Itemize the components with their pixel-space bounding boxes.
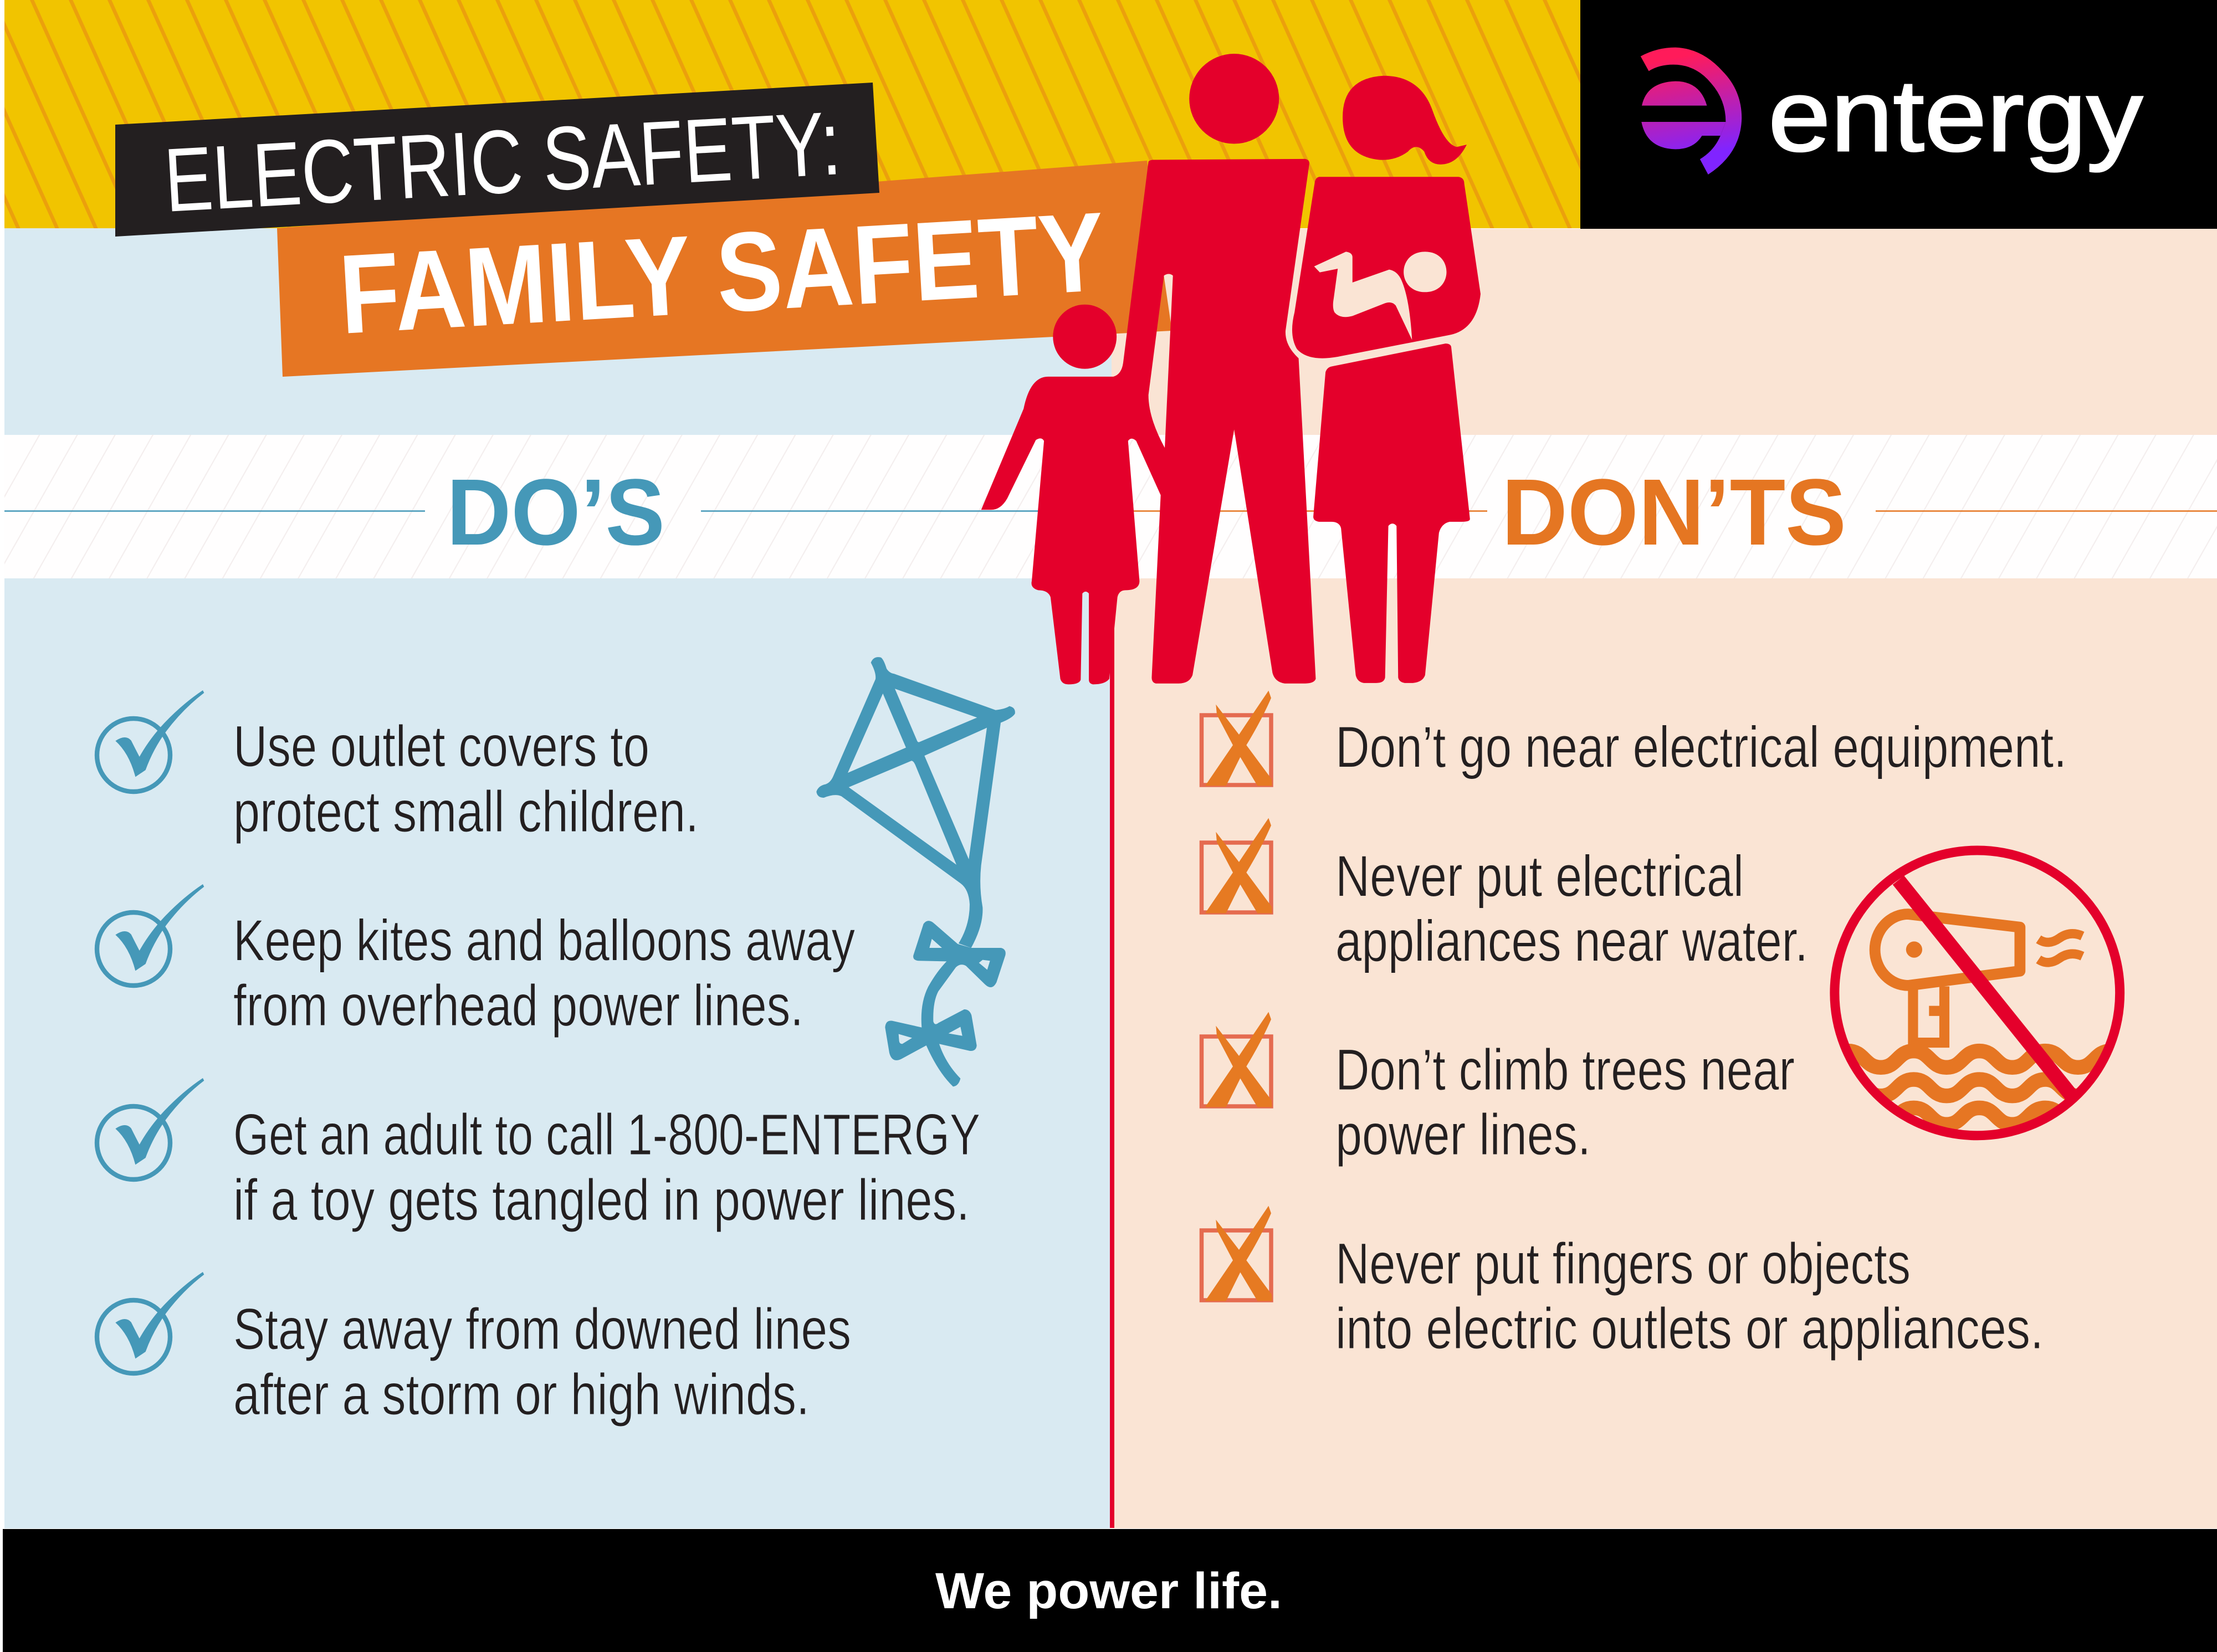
heading: donts: DON’TS <box>1502 460 1846 565</box>
item 3 text: if a toy gets tangled in power lines. <box>233 1168 970 1233</box>
heading: dos: DO’S <box>447 460 665 565</box>
icon: kite <box>816 657 1015 1086</box>
title banner: electric safety: ELECTRIC SAFETY: <box>162 92 843 231</box>
dryer body <box>1875 914 2020 986</box>
item 3 text: Don’t climb trees near <box>1335 1038 1795 1102</box>
item 4 text <box>233 1297 851 1427</box>
prohibition slash <box>1898 880 2072 1097</box>
panel: dos upper background <box>4 228 1112 435</box>
item 3 x box <box>1201 1012 1272 1107</box>
panel: donts lower background <box>1110 578 2217 1528</box>
item 3 text <box>1335 1038 1795 1167</box>
dryer dot <box>1906 941 1922 958</box>
panel: yellow striped header <box>4 0 1583 228</box>
item 4 text: into electric outlets or appliances. <box>1335 1296 2044 1361</box>
item 2 text: from overhead power lines. <box>233 973 803 1038</box>
item 2 text <box>233 909 855 1038</box>
dryer air <box>2039 933 2082 962</box>
red vertical divider <box>1110 609 1114 1528</box>
item 3 check <box>97 1078 204 1179</box>
item 4 text <box>1335 1232 2044 1361</box>
logo: entergy <box>1641 48 2143 175</box>
item 1 text <box>233 714 699 844</box>
water waves <box>1848 1051 2111 1125</box>
panel: donts upper background <box>1112 229 2217 435</box>
item 4 text: Stay away from downed lines <box>233 1297 851 1362</box>
title banner: family safety: FAMILY SAFETY <box>336 189 1108 358</box>
footer bar <box>3 1529 2217 1652</box>
icon: entergy mark <box>1641 48 1742 175</box>
band: heading strip <box>4 435 2217 578</box>
item 1 check <box>97 690 204 792</box>
list: donts <box>1201 691 2067 1361</box>
icon: no hair dryer near water <box>1835 850 2120 1136</box>
item 2 text: Never put electrical <box>1335 844 1744 909</box>
illustration: family silhouette <box>981 54 1481 684</box>
footer tagline: We power life. <box>935 1563 1282 1619</box>
child head <box>1053 305 1117 369</box>
item 4 x box <box>1201 1206 1272 1301</box>
item 2 text: appliances near water. <box>1335 909 1808 974</box>
item 1 text: Use outlet covers to <box>233 714 649 779</box>
item 2 x box <box>1201 818 1272 913</box>
item 3 text: Get an adult to call 1-800-ENTERGY <box>233 1102 980 1167</box>
item 2 check <box>97 884 204 986</box>
item 4 text: Never put fingers or objects <box>1335 1232 1911 1296</box>
item 1 x box <box>1201 691 1272 786</box>
item 2 text: Keep kites and balloons away <box>233 909 855 973</box>
list: dos <box>97 690 980 1427</box>
logo panel: black box <box>1580 0 2217 229</box>
prohibition ring <box>1835 850 2120 1136</box>
mother upper body with baby <box>1292 177 1481 358</box>
wordmark: entergy <box>1768 58 2143 172</box>
father head <box>1189 54 1279 144</box>
father and child body <box>981 159 1315 684</box>
item 4 check <box>97 1272 204 1373</box>
item 4 text: after a storm or high winds. <box>233 1362 810 1427</box>
item 1 text: Don’t go near electrical equipment. <box>1335 715 2067 780</box>
panel: dos lower background <box>4 578 1110 1528</box>
item 3 text: power lines. <box>1335 1102 1591 1167</box>
item 1 text: protect small children. <box>233 779 699 844</box>
dryer handle <box>1913 986 1944 1043</box>
mother lower body <box>1313 343 1470 683</box>
mother head and hair <box>1343 76 1467 165</box>
item 2 text <box>1335 844 1808 974</box>
item 3 text <box>233 1102 980 1233</box>
